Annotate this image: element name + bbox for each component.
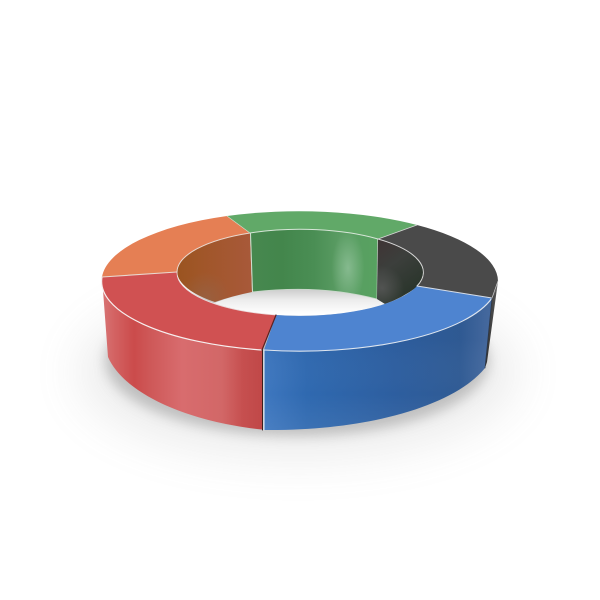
inner wall: orange bbox=[177, 233, 252, 302]
top face: black segment bbox=[378, 225, 498, 298]
top face: green segment bbox=[227, 211, 417, 239]
top face: orange segment bbox=[102, 216, 250, 277]
top face: blue segment bbox=[264, 286, 492, 351]
segment edge highlights bbox=[102, 216, 498, 430]
outer wall: red bbox=[102, 277, 262, 430]
outer wall: black bbox=[485, 281, 498, 368]
inner wall: green bbox=[250, 229, 378, 299]
outer wall: blue bbox=[264, 298, 492, 430]
ground shadow bbox=[80, 284, 516, 456]
top face: red segment bbox=[102, 272, 276, 350]
hole floor bbox=[205, 293, 395, 316]
inner wall: black bbox=[377, 239, 424, 304]
